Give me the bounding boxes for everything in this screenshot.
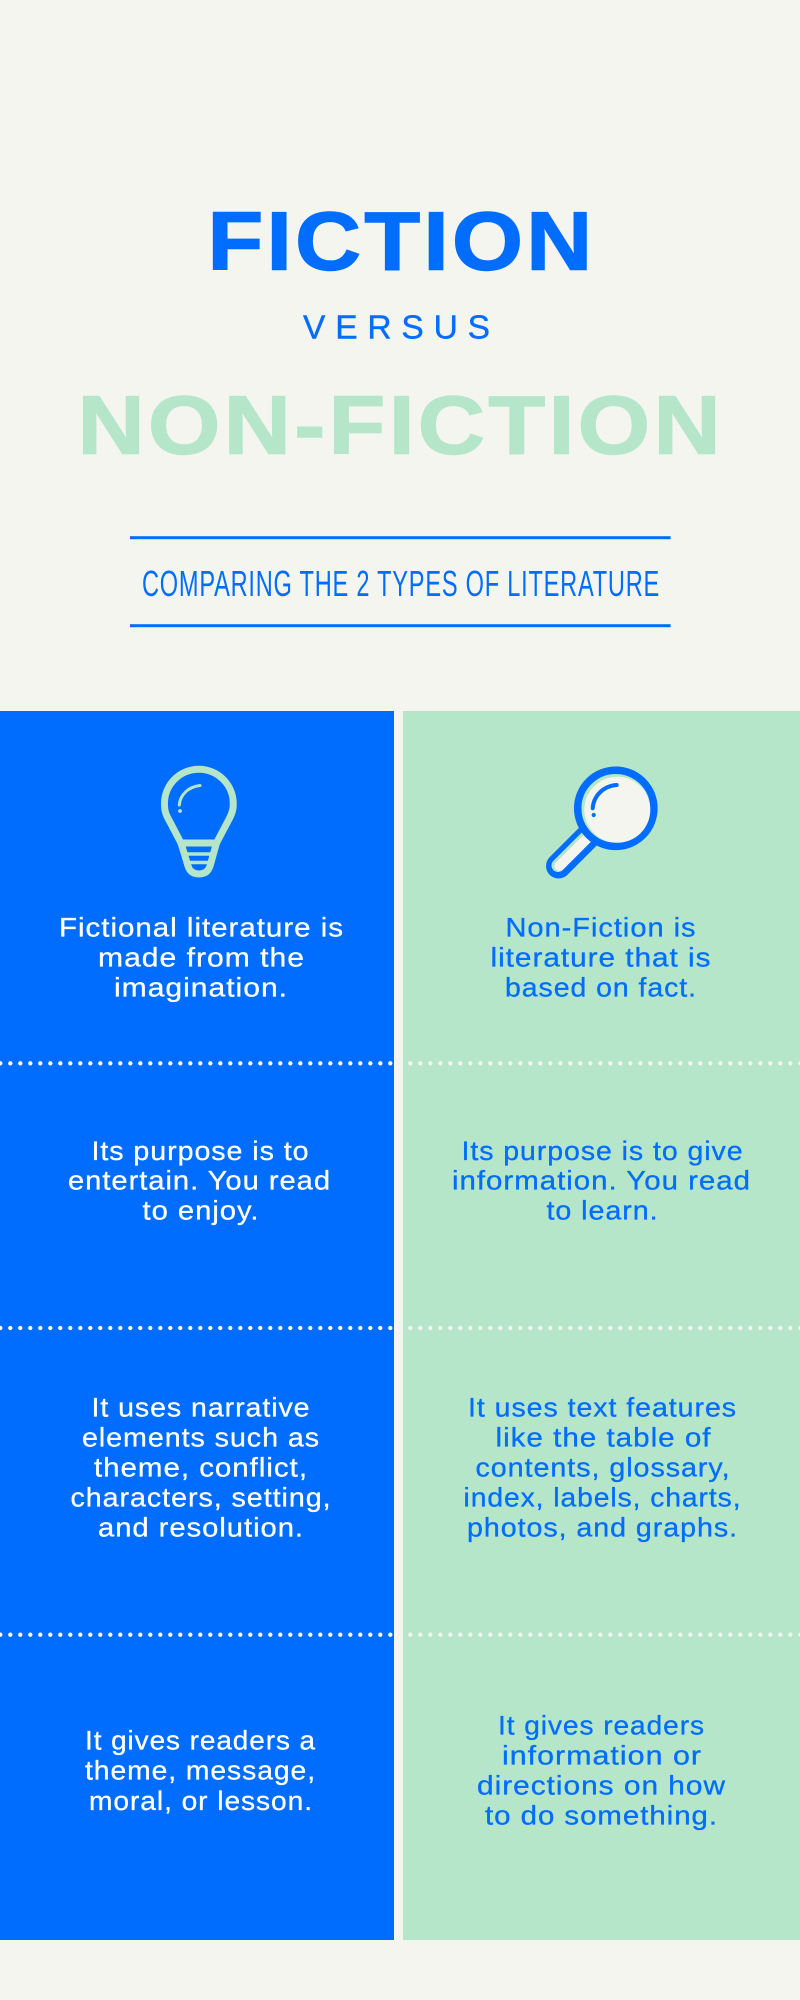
text: definition — [59, 912, 344, 1002]
text: definition: imagination. — [114, 972, 288, 1002]
text: information: information or — [502, 1740, 702, 1770]
text: purpose: to learn. — [546, 1195, 658, 1225]
subtitle: versus: VERSUS — [303, 310, 490, 346]
text: narrative elements: and resolution. — [98, 1513, 304, 1543]
text: narrative elements: characters, setting, — [70, 1483, 332, 1513]
icon: magnifying glass — [558, 770, 654, 866]
text: definition: based on fact. — [505, 973, 697, 1003]
text: narrative elements: It uses narrative — [92, 1393, 310, 1423]
text: narrative elements: theme, conflict, — [94, 1453, 308, 1483]
panel: fiction — [0, 711, 394, 1940]
tagline with rules — [130, 536, 671, 627]
header — [78, 194, 724, 627]
text: definition: Non-Fiction is — [506, 913, 696, 943]
text: message: theme, message, — [85, 1755, 316, 1785]
text: purpose — [452, 1136, 751, 1225]
text: information — [477, 1710, 726, 1830]
text: message — [85, 1725, 316, 1816]
text: information: directions on how — [477, 1770, 726, 1800]
text: definition: Fictional literature is — [59, 912, 344, 942]
text: narrative elements — [70, 1393, 332, 1543]
text: narrative elements: elements such as — [82, 1423, 320, 1453]
text: text features — [464, 1393, 742, 1543]
text: text features: contents, glossary, — [476, 1453, 730, 1483]
icon: light bulb — [164, 769, 233, 874]
text: text features: like the table of — [496, 1423, 712, 1453]
text: definition — [490, 913, 712, 1003]
panel: non-fiction — [403, 711, 800, 1940]
title: fiction: FICTION — [208, 194, 596, 288]
text: definition: made from the — [98, 942, 305, 972]
title: non-fiction: NON-FICTION — [78, 378, 724, 472]
text: purpose: Its purpose is to — [92, 1136, 310, 1166]
text: purpose: Its purpose is to give — [462, 1136, 744, 1166]
text: definition: literature that is — [490, 943, 712, 973]
text: information: to do something. — [485, 1800, 718, 1830]
text: purpose — [68, 1136, 331, 1225]
text: text features: It uses text features — [468, 1393, 737, 1423]
text: purpose: entertain. You read — [68, 1166, 331, 1196]
text: purpose: information. You read — [452, 1166, 751, 1196]
text: information: It gives readers — [498, 1710, 705, 1740]
text: message: moral, or lesson. — [89, 1786, 313, 1816]
text: message: It gives readers a — [85, 1725, 316, 1755]
text: text features: index, labels, charts, — [464, 1483, 742, 1513]
text: purpose: to enjoy. — [142, 1195, 260, 1225]
text: text features: photos, and graphs. — [467, 1513, 738, 1543]
